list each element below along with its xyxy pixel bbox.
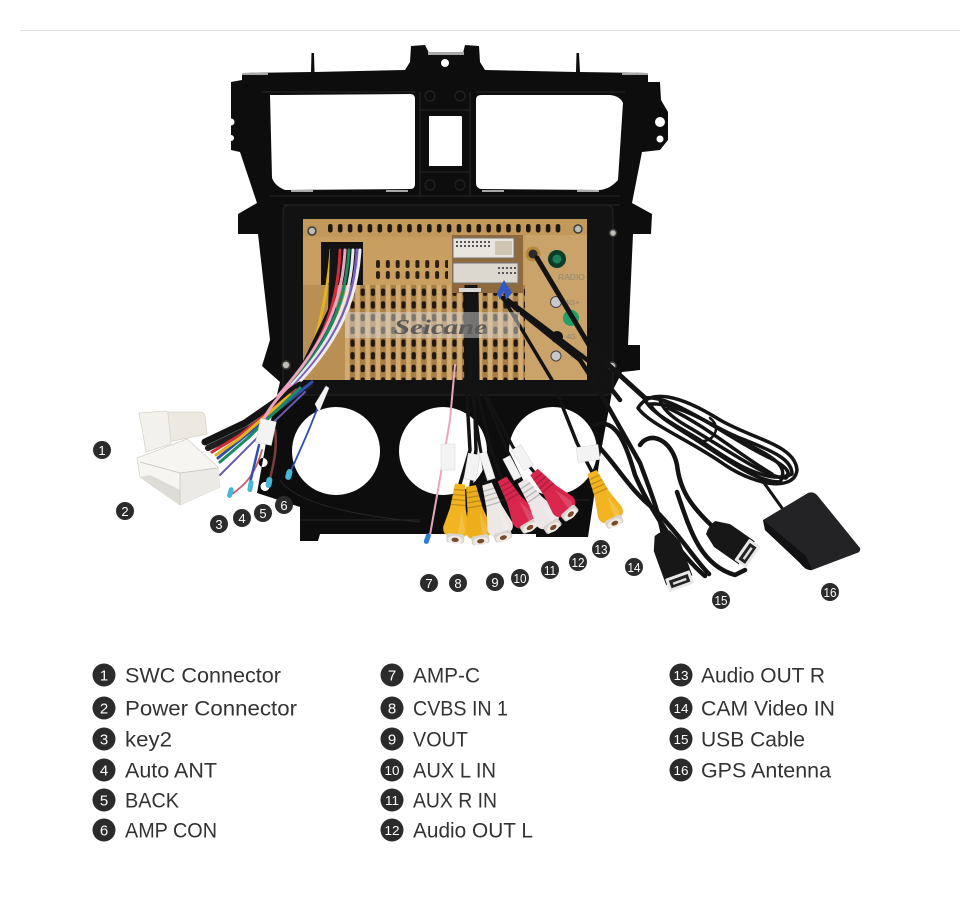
legend: BACK: BACK	[125, 790, 179, 812]
panel: wire harness to connectors	[205, 382, 325, 494]
plug: white	[475, 480, 517, 545]
radio antenna sockets: GPS	[570, 351, 586, 360]
legend: Auto ANT: 4	[100, 762, 108, 780]
legend: CVBS IN 1: 8	[388, 700, 396, 718]
legend column 2	[380, 664, 533, 842]
pink amp wire	[430, 365, 455, 535]
legend column 1	[92, 664, 297, 842]
callout 10: 10	[514, 571, 526, 586]
legend: GPS Antenna: 16	[674, 763, 688, 778]
frame silver clips	[242, 52, 648, 192]
legend: AUX L IN	[380, 758, 496, 782]
legend: Power Connector: Power Connector	[125, 698, 297, 720]
callout numbers on photo	[93, 441, 839, 609]
legend: Audio OUT R: Audio OUT R	[701, 664, 825, 688]
radio antenna sockets: RADIO	[558, 272, 585, 282]
callout 9	[486, 573, 504, 591]
legend column 3	[670, 664, 835, 782]
watermark: Seicane	[394, 315, 487, 339]
callout 16: 16	[824, 585, 836, 600]
callout 11	[541, 561, 559, 579]
callout 8	[449, 574, 467, 592]
legend: AMP-C: AMP-C	[413, 664, 480, 688]
legend: AUX R IN: AUX R IN	[413, 790, 497, 812]
plug: yellow 3	[580, 467, 628, 532]
left connector socket	[321, 242, 363, 285]
legend: AUX L IN: 10	[384, 763, 400, 778]
legend: AMP-C	[380, 664, 480, 688]
icon: USB plug 1	[648, 527, 695, 592]
callout 7	[420, 574, 438, 592]
legend: Auto ANT: Auto ANT	[125, 760, 217, 782]
legend: CVBS IN 1	[380, 696, 508, 720]
callout 15: 15	[714, 593, 728, 608]
callout 11: 11	[544, 563, 556, 578]
legend: AUX R IN: 11	[385, 793, 399, 808]
icons: RCA plugs	[442, 463, 628, 547]
callout 4	[233, 509, 251, 527]
callout 2: 2	[121, 504, 129, 519]
callout 3	[210, 515, 228, 533]
callout 12	[569, 553, 587, 571]
right connector block	[452, 235, 523, 293]
panel: gold head unit back	[282, 219, 616, 380]
legend: key2	[92, 728, 172, 752]
callout 10	[511, 569, 529, 587]
cooling fins	[345, 285, 547, 380]
radio antenna sockets: 4G+	[565, 298, 580, 307]
ear holes	[228, 59, 665, 142]
middle vents	[376, 260, 448, 279]
icon: power connector	[137, 439, 220, 505]
callout 3: 3	[215, 517, 223, 532]
legend: SWC Connector: SWC Connector	[125, 664, 281, 688]
plug: white 2	[511, 474, 566, 538]
legend: SWC Connector: 1	[100, 668, 108, 684]
callout 14	[625, 558, 643, 576]
icons: blue crimp terminals	[227, 468, 432, 545]
small signal wires	[232, 450, 262, 494]
legend: CAM Video IN: 14	[674, 701, 688, 716]
callout 8: 8	[454, 576, 462, 591]
icon: GPS antenna puck	[763, 492, 860, 570]
callout 9: 9	[491, 575, 499, 590]
frame moulding highlights	[262, 91, 625, 522]
legend: BACK: 5	[100, 792, 108, 810]
callout 1: 1	[98, 443, 106, 458]
callout 2	[116, 502, 134, 520]
callout 6: 6	[280, 498, 288, 513]
callout 4: 4	[238, 511, 246, 526]
cable tie	[459, 288, 481, 292]
labels: small wire tags	[256, 386, 600, 481]
legend: AMP CON	[92, 818, 217, 842]
legend: AUX R IN	[380, 788, 497, 812]
legend: CVBS IN 1: CVBS IN 1	[413, 698, 508, 720]
watermark band	[345, 312, 520, 338]
legend: USB Cable: USB Cable	[701, 728, 805, 752]
icon: USB plug 2	[701, 515, 761, 569]
callout 16	[821, 583, 839, 601]
legend: AMP-C: 7	[388, 668, 396, 684]
callout 12: 12	[572, 555, 584, 570]
top vent row	[328, 224, 562, 233]
legend: AUX L IN: AUX L IN	[413, 760, 496, 782]
legend: VOUT: 9	[388, 732, 396, 748]
callout 14: 14	[628, 560, 640, 575]
icon: coloured wires in socket	[225, 250, 360, 448]
legend: VOUT: VOUT	[413, 728, 468, 752]
radio antenna sockets: 4G	[566, 332, 576, 341]
callout 5: 5	[259, 506, 267, 521]
legend: Power Connector: 2	[100, 700, 108, 718]
legend: Auto ANT	[92, 758, 217, 782]
legend: key2: key2	[125, 728, 172, 752]
legend: Audio OUT L: Audio OUT L	[413, 820, 533, 842]
callout 1	[93, 441, 111, 459]
legend: BACK	[92, 788, 179, 812]
icon: SWC connector	[139, 411, 207, 452]
panel: black video and audio cable bundle	[430, 258, 745, 576]
plug: CVBS yellow	[442, 483, 473, 545]
callout 5	[254, 504, 272, 522]
callout 13: 13	[594, 542, 608, 557]
screws	[282, 225, 616, 370]
legend: AMP CON: 6	[100, 822, 108, 840]
plug: VOUT yellow	[458, 484, 494, 547]
callout 15	[712, 591, 730, 609]
plug: red 2	[524, 463, 583, 526]
panel: dark recess behind head unit	[283, 205, 613, 395]
legend: Audio OUT R: 13	[674, 668, 688, 683]
legend: USB Cable: 15	[674, 732, 688, 747]
legend: GPS Antenna: GPS Antenna	[701, 760, 831, 782]
plug: red	[491, 472, 543, 537]
callout 7: 7	[425, 576, 433, 591]
panel: GPS cable coil	[638, 396, 797, 508]
radio antenna sockets	[525, 235, 587, 380]
legend: VOUT	[380, 728, 468, 752]
callout 13	[592, 540, 610, 558]
blue clip	[497, 280, 512, 300]
top divider line	[20, 30, 960, 31]
legend: Audio OUT L: 12	[384, 823, 400, 838]
legend: key2: 3	[100, 732, 108, 748]
legend: CAM Video IN: CAM Video IN	[701, 698, 835, 720]
legend: AMP CON: AMP CON	[125, 820, 217, 842]
callout 6	[275, 496, 293, 514]
panel: black mounting frame	[228, 45, 668, 541]
